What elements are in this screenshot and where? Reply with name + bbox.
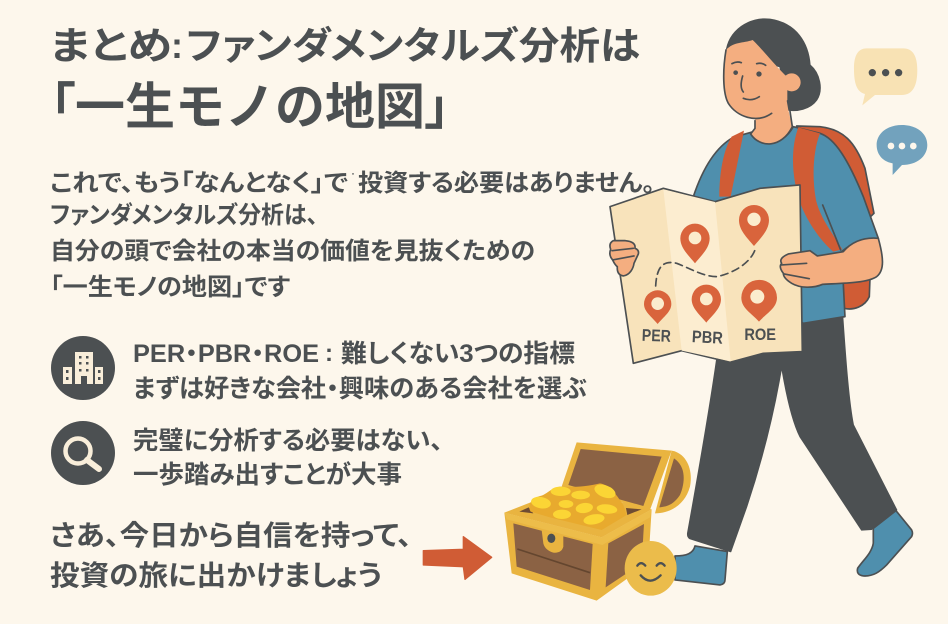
text block: intro: ファンダメンタルズ分析は、 <box>50 201 318 229</box>
backpack <box>797 126 874 309</box>
shoes <box>675 511 912 585</box>
treasure chest <box>504 442 691 601</box>
speech bubble: blue <box>877 125 927 175</box>
map pins <box>644 205 777 324</box>
title: 」 <box>424 79 474 135</box>
text block: point 2 <box>133 427 443 489</box>
text block: intro: 「一生モノの地図」です <box>50 274 290 301</box>
text block: closing message <box>50 520 412 591</box>
icon: smiley <box>625 541 677 596</box>
title: まとめ <box>50 26 172 68</box>
speech bubble: yellow <box>854 48 917 105</box>
chest rim <box>504 503 652 537</box>
arrow <box>423 537 492 579</box>
text block: point 1: まずは好きな会社・興味のある会社を選ぶ <box>133 375 587 403</box>
text block: intro: ˙ <box>351 171 355 185</box>
text block: intro: 投資する必要はありません。 <box>358 170 655 197</box>
hair back <box>726 19 820 110</box>
icon: buildings <box>51 336 115 400</box>
left hand <box>610 241 639 276</box>
clasp <box>542 530 563 553</box>
map labels: PER <box>642 326 671 346</box>
trousers <box>688 317 897 552</box>
text block: point 2: 一歩踏み出すことが大事 <box>133 460 402 489</box>
text block: intro: 自分の頭で会社の本当の価値を見抜くための <box>50 238 535 265</box>
right arm and hand <box>780 238 882 287</box>
chest lid <box>655 451 691 513</box>
text block: intro: これで、もう「なんとなく」で <box>50 170 348 197</box>
neck <box>751 97 792 144</box>
text block: closing message: 投資の旅に出かけましょう <box>50 560 382 591</box>
map route <box>656 250 755 286</box>
title: : <box>171 25 183 66</box>
map labels <box>642 325 776 348</box>
text block: point 1 <box>133 340 587 403</box>
text block: point 1: 難しくない3つの指標 <box>341 340 575 368</box>
title: 一生モノの地図 <box>75 79 425 135</box>
text block: intro <box>50 170 655 301</box>
text block: point 1: : <box>325 340 333 367</box>
text block: closing message: さあ、今日から自信を持って、 <box>50 520 412 551</box>
person with map <box>610 19 912 585</box>
backpack straps <box>719 127 842 252</box>
map labels: ROE <box>744 325 776 344</box>
face <box>724 40 787 119</box>
title: ファンダメンタルズ分析は <box>186 25 640 68</box>
facial features <box>732 62 766 100</box>
coins <box>529 483 627 530</box>
map labels: PBR <box>691 327 723 348</box>
text block: point 1: PER・PBR・ROE <box>133 340 319 368</box>
icon: magnifier <box>51 421 115 485</box>
text block: point 2: 完璧に分析する必要はない、 <box>133 427 443 455</box>
chest body <box>504 509 652 601</box>
title <box>26 25 640 135</box>
title: 「 <box>26 79 76 135</box>
shirt <box>693 127 878 323</box>
map <box>610 185 802 363</box>
